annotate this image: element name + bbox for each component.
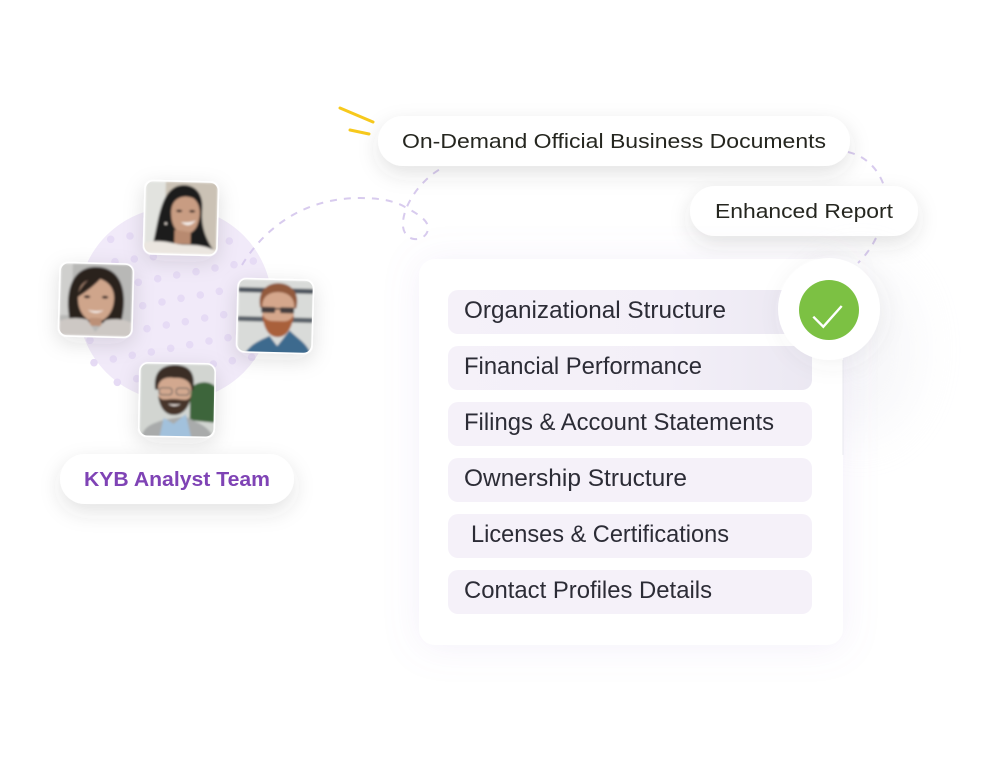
icon: yellow spark lines bbox=[340, 108, 373, 134]
dashed connector: team to documents bbox=[242, 168, 442, 265]
row: contact profiles details bbox=[448, 570, 812, 614]
row: financial performance: Financial Performance bbox=[464, 353, 702, 380]
row: financial performance bbox=[448, 346, 812, 390]
row: ownership structure bbox=[448, 458, 812, 502]
row: organizational structure bbox=[448, 290, 812, 334]
soft shadow right of card bbox=[805, 265, 915, 435]
row: licenses and certifications: Licenses & Certifications bbox=[471, 521, 729, 548]
icon: green check badge bbox=[778, 258, 880, 360]
row: filings and account statements bbox=[448, 402, 812, 446]
row: organizational structure: Organizational Structure bbox=[464, 297, 726, 324]
photo: woman left bbox=[58, 262, 134, 338]
row: ownership structure: Ownership Structure bbox=[464, 465, 687, 492]
pill: on-demand documents bbox=[378, 116, 850, 166]
pill: enhanced report bbox=[690, 186, 918, 236]
row: filings and account statements: Filings & Account Statements bbox=[464, 409, 774, 436]
team circle with dots bbox=[78, 207, 272, 401]
row: licenses and certifications bbox=[448, 514, 812, 558]
pill: KYB analyst team: KYB Analyst Team bbox=[84, 468, 270, 491]
row: contact profiles details: Contact Profiles Details bbox=[464, 577, 712, 604]
dashed connector: documents to enhanced report bbox=[848, 152, 884, 186]
panel: report card bbox=[419, 259, 843, 645]
pill: KYB analyst team bbox=[60, 454, 294, 504]
pill: on-demand documents: On-Demand Official Business Documents bbox=[402, 130, 826, 153]
photo: man bottom bbox=[138, 362, 216, 440]
dashed connector: enhanced report to check bbox=[858, 238, 876, 263]
pill: enhanced report: Enhanced Report bbox=[715, 200, 893, 223]
photo: man right bbox=[235, 278, 314, 356]
photo: woman top bbox=[142, 180, 219, 256]
